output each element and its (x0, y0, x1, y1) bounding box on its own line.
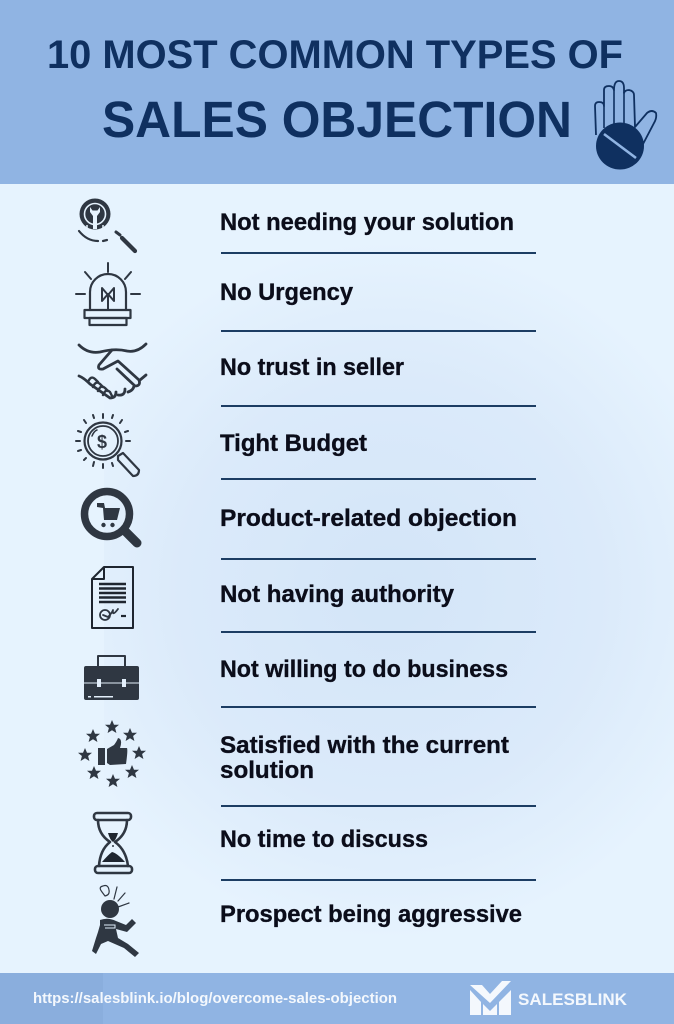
icon: alarm siren (76, 263, 140, 325)
panel: footer band (0, 973, 674, 1024)
text: item 5: Product-related objection (220, 505, 517, 532)
panel: header band (0, 0, 674, 184)
icon: hourglass (94, 813, 132, 873)
text: item 10: Prospect being aggressive (220, 901, 522, 928)
text: item 7: Not willing to do business (220, 656, 508, 683)
text: item 6: Not having authority (220, 581, 455, 608)
text: item 8 (220, 732, 509, 784)
icon: handshake (79, 344, 146, 398)
icon: signed document (92, 567, 133, 628)
text: item 3: No trust in seller (220, 354, 404, 381)
heading: title line two: SALES OBJECTION (102, 91, 572, 148)
icon: budget magnifier (76, 414, 139, 476)
text: item 2: No Urgency (220, 279, 354, 306)
icon: budget magnifier: $ (97, 432, 107, 452)
text: item 8: solution (220, 757, 314, 784)
icon: thumbs up with stars (78, 720, 146, 787)
text: item 4: Tight Budget (220, 430, 367, 457)
heading: title line one: 10 MOST COMMON TYPES OF (47, 33, 623, 77)
text: footer url: https://salesblink.io/blog/overcome-sales-objection (33, 990, 397, 1007)
text: item 1: Not needing your solution (220, 209, 514, 236)
icon: magnifier with wrench (79, 198, 135, 251)
icon: aggressive person (92, 886, 139, 957)
icon: stop hand (595, 81, 656, 170)
panel: body background (0, 184, 674, 973)
icon: cart magnifier (84, 492, 137, 543)
text: item 8: Satisfied with the current (220, 732, 509, 759)
text: item 9: No time to discuss (220, 826, 428, 853)
icon: salesblink logo (470, 981, 511, 1015)
text: salesblink wordmark: SALESBLINK (518, 991, 627, 1009)
icon: briefcase (84, 656, 139, 700)
